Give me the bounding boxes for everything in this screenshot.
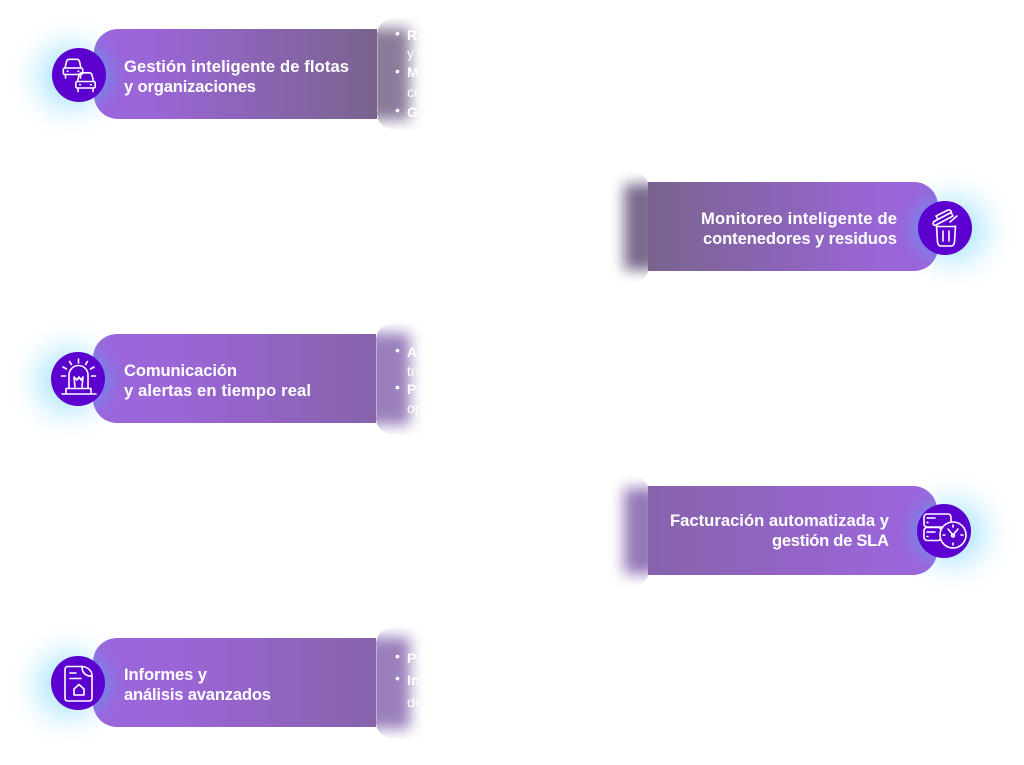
heading: Monitoreo inteligente de xyxy=(701,209,897,228)
heading xyxy=(701,209,897,248)
side panel: de xyxy=(407,694,423,710)
side panel: Pa xyxy=(407,650,424,666)
card: Facturación automatizada y gestión de SLA xyxy=(624,486,985,575)
heading xyxy=(124,57,349,96)
icon: document xyxy=(51,656,105,710)
side panel: Ra xyxy=(407,27,425,43)
side panel: op xyxy=(407,400,423,416)
heading: y organizaciones xyxy=(124,77,256,96)
icon: alarm light xyxy=(51,352,105,406)
side panel: y r xyxy=(407,45,423,61)
banner xyxy=(93,638,376,727)
heading xyxy=(670,511,890,550)
side panel xyxy=(376,323,420,435)
heading: gestión de SLA xyxy=(772,531,889,550)
banner xyxy=(94,29,377,119)
side panel: • xyxy=(395,102,400,118)
side panel: tra xyxy=(407,363,424,379)
icon: cars xyxy=(52,48,106,102)
glow xyxy=(37,653,101,717)
side panel xyxy=(377,18,420,130)
banner xyxy=(648,486,936,575)
card: Monitoreo inteligente de contenedores y residuos xyxy=(624,182,986,271)
heading xyxy=(124,361,311,400)
glow xyxy=(37,349,101,413)
side panel: • xyxy=(395,25,400,41)
side panel: • xyxy=(395,63,400,79)
icon: servers and clock xyxy=(917,504,971,558)
banner xyxy=(648,182,970,271)
glow xyxy=(38,45,102,109)
banner xyxy=(93,334,376,423)
heading: Comunicación xyxy=(124,361,237,380)
card: Comunicación y alertas en tiempo real xyxy=(37,333,426,425)
heading: y alertas en tiempo real xyxy=(124,381,311,400)
glow xyxy=(921,501,985,565)
side panel: • xyxy=(395,648,400,664)
side panel xyxy=(624,488,660,574)
side panel: • xyxy=(395,342,400,358)
glow xyxy=(922,198,986,262)
side panel xyxy=(624,184,660,270)
side panel: Mo xyxy=(407,64,427,80)
heading: Informes y xyxy=(124,665,208,684)
side panel: co xyxy=(407,84,422,100)
heading: contenedores y residuos xyxy=(703,229,897,248)
heading xyxy=(124,665,271,704)
side panel: Ge xyxy=(407,104,426,120)
card: Gestión inteligente de flotas xyxy=(38,25,427,120)
side panel: • xyxy=(395,379,400,395)
side panel: • xyxy=(395,670,400,686)
heading: Gestión inteligente de flotas xyxy=(124,57,349,76)
side panel: Inf xyxy=(407,672,424,688)
side panel: Pa xyxy=(407,381,424,397)
side panel: Ap xyxy=(407,344,426,360)
card: Informes y análisis avanzados xyxy=(37,637,424,729)
side panel xyxy=(376,627,420,739)
heading: Facturación automatizada y xyxy=(670,511,890,530)
icon: trash bin xyxy=(918,201,972,255)
heading: análisis avanzados xyxy=(124,685,271,704)
